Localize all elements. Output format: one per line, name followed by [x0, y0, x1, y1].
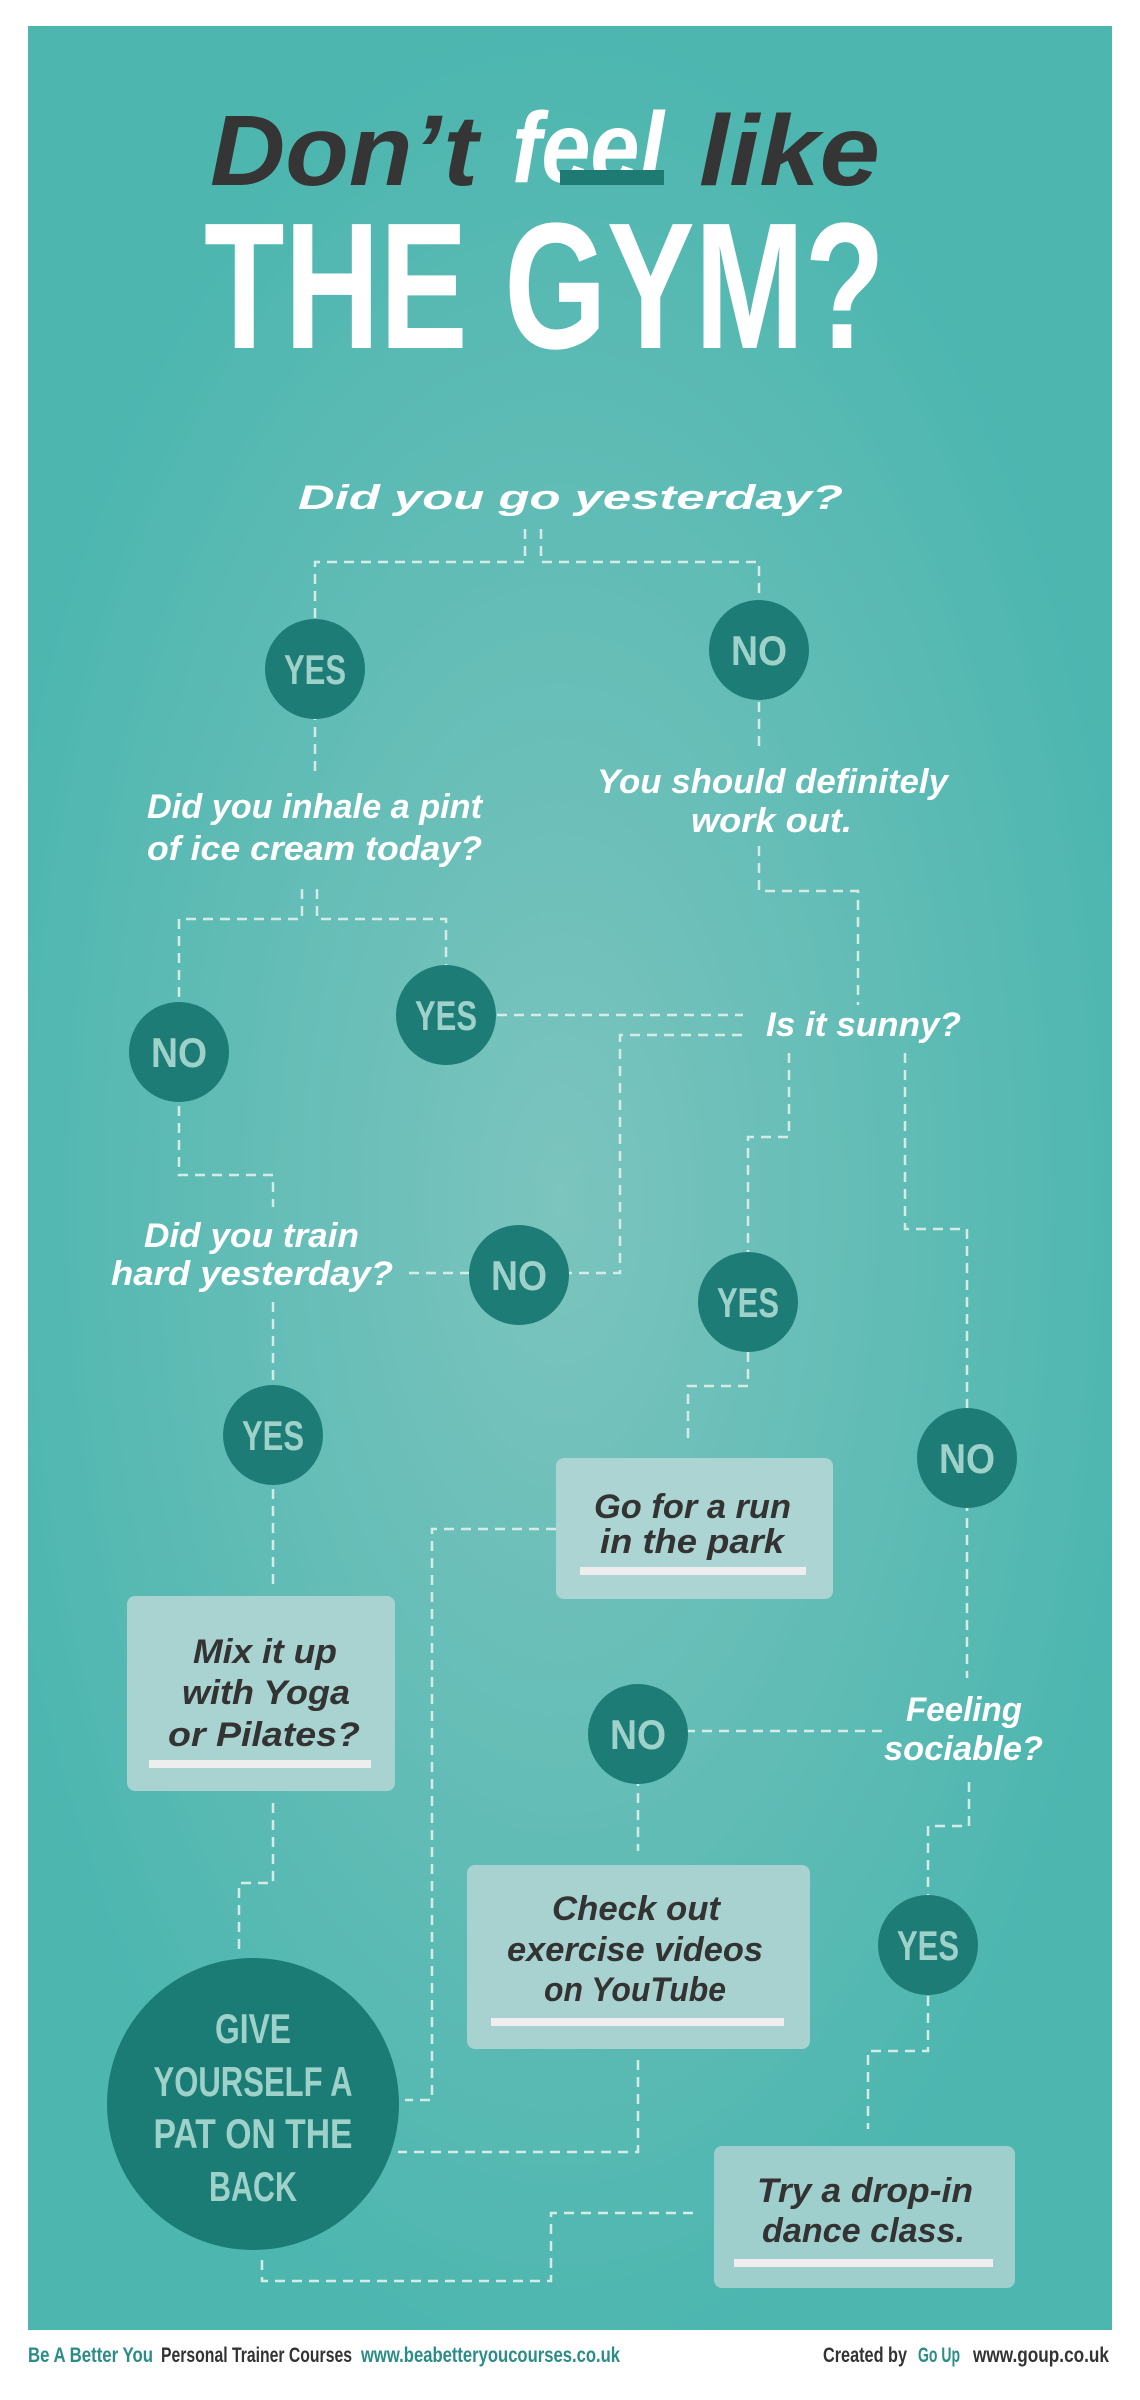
circle: no 4: NO	[939, 1435, 995, 1482]
question: ice cream: of ice cream today?	[147, 830, 482, 868]
question: ice cream: Did you inhale a pint	[147, 788, 484, 826]
text: you should work out: You should definitely	[597, 763, 950, 801]
circle: yes 1: YES	[284, 646, 346, 693]
footer right	[823, 2344, 1109, 2367]
question: train hard: hard yesterday?	[111, 1255, 393, 1293]
footer left: Personal Trainer Courses	[161, 2344, 352, 2367]
question: train hard: Did you train	[144, 1217, 359, 1255]
circle: pat on the back: YOURSELF A	[154, 2058, 352, 2105]
footer right: Created by	[823, 2344, 907, 2367]
circle: yes 5	[878, 1895, 978, 1995]
box: yoga or pilates: or Pilates?	[168, 1716, 360, 1754]
circle: no 5	[588, 1684, 688, 1784]
circle: yes 5: YES	[897, 1922, 959, 1969]
circle: yes 4	[223, 1385, 323, 1485]
question: feeling sociable: sociable?	[884, 1730, 1043, 1768]
title line 1: Don’t	[210, 95, 482, 207]
box: youtube videos	[467, 1865, 810, 2049]
circle: no 1	[709, 600, 809, 700]
circle: yes 2	[396, 965, 496, 1065]
box: youtube videos: exercise videos	[507, 1931, 763, 1969]
circle: yes 4: YES	[242, 1412, 304, 1459]
circle: yes 1	[265, 619, 365, 719]
footer right: www.goup.co.uk	[972, 2344, 1109, 2367]
footer right: Go Up	[918, 2344, 960, 2367]
question: is it sunny: Is it sunny?	[766, 1006, 961, 1044]
circle: yes 3: YES	[717, 1279, 779, 1326]
circle: yes 2: YES	[415, 992, 477, 1039]
connectors	[179, 529, 969, 2281]
circle: no 4	[917, 1408, 1017, 1508]
circle: pat on the back: BACK	[209, 2163, 297, 2210]
circle: no 3: NO	[491, 1252, 547, 1299]
circle: yes 3	[698, 1252, 798, 1352]
text: you should work out: work out.	[691, 802, 852, 840]
footer left	[28, 2344, 620, 2367]
question: train hard	[111, 1217, 393, 1293]
circle: no 1: NO	[731, 627, 787, 674]
box: youtube videos: on YouTube	[544, 1971, 726, 2009]
title line 1	[210, 92, 880, 207]
title line 1: like	[699, 95, 880, 207]
circle: no 2: NO	[151, 1029, 207, 1076]
title line 2: THE GYM?	[204, 186, 885, 387]
circle: no 5: NO	[610, 1711, 666, 1758]
box: dance class	[714, 2146, 1015, 2288]
text: you should work out	[597, 763, 950, 840]
box: yoga or pilates: with Yoga	[182, 1674, 350, 1712]
question: did you go yesterday: Did you go yesterday?	[298, 479, 843, 517]
circle: no 3	[469, 1225, 569, 1325]
box: run in the park: in the park	[600, 1523, 786, 1561]
title line 1: feel	[512, 92, 666, 204]
question: ice cream	[147, 788, 484, 868]
box: run in the park: Go for a run	[594, 1488, 791, 1526]
box: run in the park	[556, 1458, 833, 1599]
circle: pat on the back	[107, 1958, 399, 2250]
footer left: www.beabetteryoucourses.co.uk	[360, 2344, 620, 2367]
box: dance class: Try a drop-in	[757, 2172, 973, 2210]
question: feeling sociable	[884, 1691, 1043, 1768]
box: dance class: dance class.	[762, 2212, 965, 2250]
footer left: Be A Better You	[28, 2344, 153, 2367]
circle: pat on the back: PAT ON THE	[154, 2110, 352, 2157]
circle: no 2	[129, 1002, 229, 1102]
box: youtube videos: Check out	[552, 1890, 722, 1928]
circle: pat on the back: GIVE	[215, 2005, 291, 2052]
box: yoga or pilates	[127, 1596, 395, 1791]
box: yoga or pilates: Mix it up	[193, 1633, 337, 1671]
question: feeling sociable: Feeling	[906, 1691, 1022, 1729]
